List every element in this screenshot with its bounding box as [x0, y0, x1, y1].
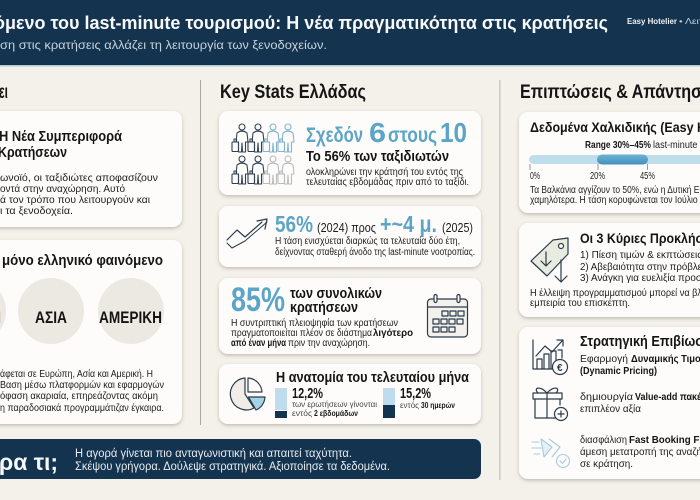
- subtitle: ση στις κρατήσεις αλλάζει τη λειτουργία των ξενοδοχείων.: [0, 38, 327, 52]
- stat description: [231, 317, 413, 349]
- stat: 15.2%: εντός: [400, 401, 419, 410]
- panel heading: [0, 129, 122, 161]
- icon: fast arrows with check: [532, 439, 570, 468]
- range label: Range 30%–45%: [585, 140, 651, 151]
- panel heading: Κρατήσεων: [0, 145, 67, 161]
- panel: three main challenges: [519, 223, 700, 317]
- column heading: key stats: Key Stats Ελλάδας: [220, 82, 366, 103]
- title: όμενο του last-minute τουρισμού: Η νέα πραγματικότητα στις κρατήσεις: [0, 12, 608, 33]
- panel body text: άφεται σε Ευρώπη, Ασία και Αμερική. Η: [0, 368, 153, 380]
- circle: Asia: [18, 278, 84, 344]
- icon: calendar: [428, 294, 468, 337]
- headline: almost 6 in 10: [306, 117, 467, 148]
- range label: [585, 140, 700, 151]
- panel: 6 in 10 travellers: [219, 111, 481, 195]
- panel heading: Η ανατομία του τελευταίου μήνα: [276, 369, 470, 386]
- panel body text: ά τον τρόπο που λειτουργούν και: [0, 194, 151, 206]
- brand label: Easy Hotelier: [627, 16, 678, 26]
- stat: 12.2%: 2 εβδομάδων: [314, 409, 358, 418]
- trend headline: 56%: [275, 211, 313, 237]
- icon: pie chart: [230, 378, 265, 410]
- panel: new booking behaviour: [0, 111, 182, 227]
- stat description: τελευταίας εβδομάδας πριν από το ταξίδι.: [306, 176, 469, 188]
- circle: Asia: ΑΣΙΑ: [35, 308, 67, 327]
- range slider chart: 0%: [530, 171, 540, 182]
- circle: America: [98, 278, 164, 344]
- stat: 12.2%: 12,2%: [292, 386, 323, 402]
- strategy: fast booking flow: σε κράτηση.: [580, 458, 633, 470]
- stat label: κρατήσεων: [290, 300, 358, 316]
- trend description: [275, 235, 475, 258]
- strategy: dynamic pricing: (Dynamic Pricing): [580, 365, 657, 377]
- trend description: δείχνοντας σταθερή άνοδο της last-minute νοοτροπίας.: [275, 246, 475, 258]
- panel body text: [0, 172, 158, 217]
- panel: 85% of bookings: [219, 278, 481, 354]
- panel heading: μόνο ελληνικό φαινόμενο: [2, 253, 163, 269]
- stat description: λιγότερο: [373, 327, 413, 339]
- call to action text: [75, 448, 390, 473]
- stat: 12.2%: των ερωτήσεων γίνονται: [292, 400, 377, 409]
- header banner: [0, 0, 700, 66]
- panel: Halkidiki data: [519, 112, 700, 213]
- panel body text: οντά στην αναχώρηση. Αυτό: [0, 183, 125, 195]
- icon: rising trend arrow: [227, 219, 267, 248]
- panel: bottom call to action: [0, 439, 481, 479]
- strategy: value-add packages: [580, 391, 700, 415]
- strategy: fast booking flow: διασφάλιση: [580, 434, 627, 446]
- strategy: dynamic pricing: Εφαρμογή: [580, 353, 628, 365]
- range slider chart: 20%: [590, 171, 605, 182]
- icon: travellers with suitcases: [232, 124, 294, 184]
- strategy: value-add packages: δημιουργία: [580, 391, 633, 403]
- stat description: [306, 166, 469, 188]
- call to action text: Σκέψου γρήγορα. Δούλεψε στρατηγικά. Αξιοποίησε τα δεδομένα.: [75, 461, 390, 473]
- call to action text: Η αγορά γίνεται πιο ανταγωνιστική και απαιτεί ταχύτητα.: [75, 448, 352, 460]
- panel heading: Η Νέα Συμπεριφορά: [0, 129, 122, 145]
- icon: price tag with down arrow: [531, 238, 568, 282]
- panel: 56% trend: [219, 206, 481, 267]
- headline: almost 6 in 10: στους: [388, 124, 437, 147]
- range slider chart: [529, 154, 700, 182]
- subheading: 56% of travellers: Το 56% των ταξιδιωτών: [306, 149, 449, 165]
- stat: 12.2%: [275, 386, 377, 418]
- stat description: από έναν μήνα: [231, 337, 286, 349]
- panel body text: ωνοϊό, οι ταξιδιώτες αποφασίζουν: [0, 172, 158, 184]
- stat: 15.2%: [383, 386, 455, 418]
- panel body text: [530, 287, 700, 309]
- trend headline: +~4 μ.: [380, 211, 437, 237]
- list of challenges: [580, 249, 700, 284]
- strategy: fast booking flow: [580, 434, 700, 470]
- trend headline: (2024) προς: [317, 220, 376, 235]
- trend description: Η τάση ενισχύεται διαρκώς τα τελευταία δύο έτη,: [275, 235, 460, 247]
- trend headline: [275, 211, 473, 237]
- panel body text: ι τα ξενοδοχεία.: [0, 205, 73, 217]
- panel body text: Βαση μέσω πλατφορμών και εφαρμογών: [0, 379, 164, 391]
- stat: 15.2%: 15,2%: [400, 386, 431, 402]
- stat description: πριν την αναχώρηση.: [288, 337, 370, 349]
- call to action heading: ρα τι;: [0, 449, 58, 475]
- stat description: πραγματοποιείται πλέον σε διάστημα: [231, 327, 372, 339]
- stat: 15.2%: 30 ημερών: [421, 401, 455, 410]
- range slider chart: 45%: [640, 171, 655, 182]
- strategy: dynamic pricing: [580, 353, 700, 377]
- headline: almost 6 in 10: Σχεδόν: [306, 124, 363, 147]
- panel body text: όφαση ακαριαία, επηρεάζοντας ακόμη: [0, 390, 158, 402]
- icon: revenue chart with euro: [533, 340, 568, 374]
- stat description: Η συντριπτική πλειοψηφία των κρατήσεων: [231, 317, 398, 329]
- panel: anatomy of the last month: [219, 364, 481, 424]
- panel body text: η παραδοσιακά προγραμμάτιζαν έγκαιρα.: [0, 402, 164, 414]
- circle: America: ΑΜΕΡΙΚΗ: [99, 308, 162, 327]
- panel body text: [530, 184, 700, 206]
- strategy: value-add packages: επιπλέον αξία: [580, 403, 641, 415]
- stat: 12.2%: εντός: [292, 409, 312, 418]
- panel: global phenomenon: [0, 240, 182, 424]
- trend headline: (2025): [442, 220, 473, 235]
- headline: almost 6 in 10: 6: [369, 117, 386, 148]
- brand label: • Λειτ: [679, 16, 700, 26]
- icon: gift with plus: [533, 388, 568, 420]
- icon: revenue chart with euro: €: [557, 363, 563, 374]
- stat label: των συνολικών: [290, 286, 382, 302]
- stat label: [290, 286, 382, 316]
- panel: survival strategy: [519, 327, 700, 479]
- headline: almost 6 in 10: 10: [440, 117, 467, 148]
- stat description: ολοκληρώνει την κράτησή του εντός της: [306, 166, 463, 178]
- circle: Europe: [0, 278, 6, 344]
- panel body text: εμπειρία του επισκέπτη.: [530, 297, 630, 309]
- big stat 85%: 85%: [231, 281, 285, 319]
- panel body text: [0, 368, 164, 414]
